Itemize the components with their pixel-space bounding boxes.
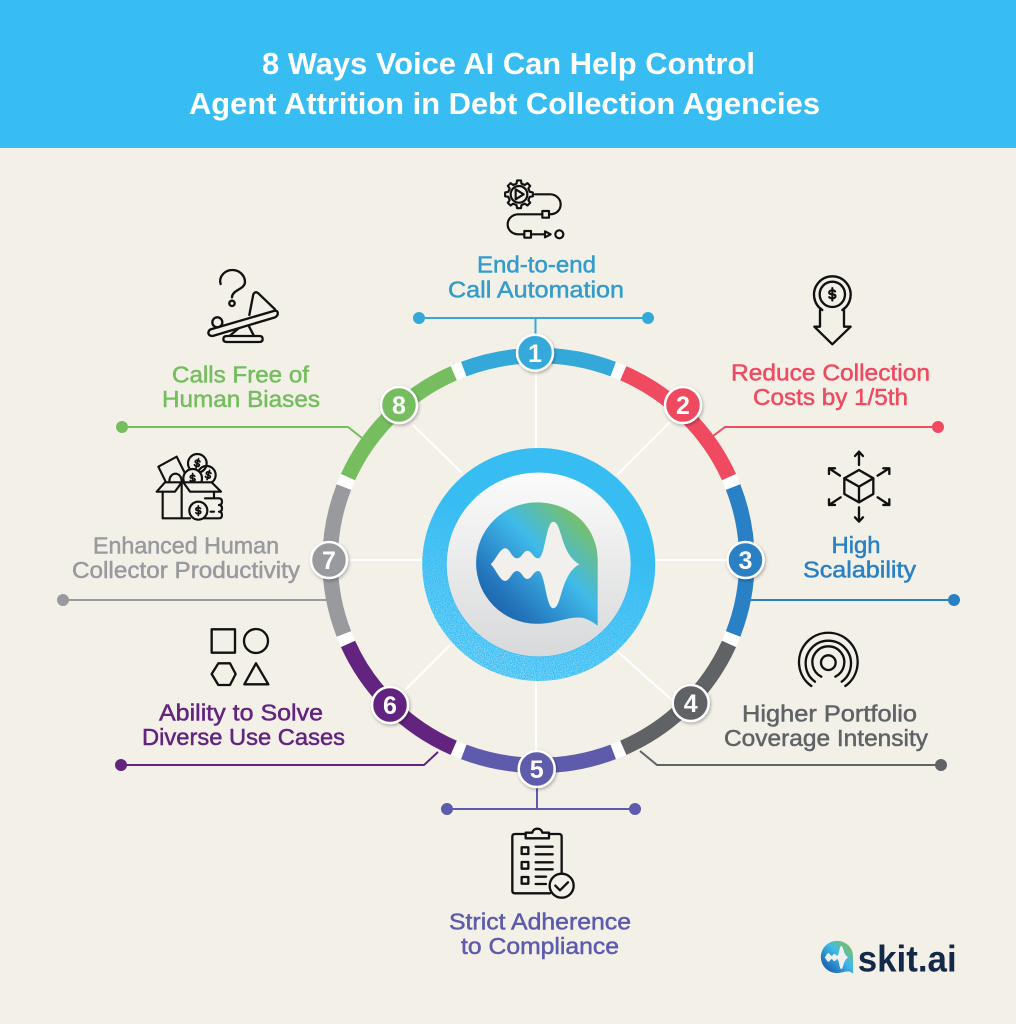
label 3: High <box>832 532 880 558</box>
badge 5 <box>519 751 555 787</box>
label 3: Scalability <box>803 557 916 583</box>
inner disc <box>447 472 631 656</box>
label 2: Reduce Collection <box>731 360 930 386</box>
label 1: End-to-end <box>477 252 596 278</box>
icon: geometric shapes <box>212 629 268 685</box>
badge 8 <box>381 387 417 423</box>
label 5: Strict Adherence <box>449 908 631 934</box>
label 6 <box>142 700 345 750</box>
label 1 <box>448 252 624 302</box>
number badges <box>311 335 764 787</box>
segment 6 <box>348 644 454 748</box>
icon: money box <box>157 454 222 520</box>
badge 8: 8 <box>392 392 406 420</box>
badge 7: 7 <box>322 547 336 575</box>
connector 4 <box>640 751 946 770</box>
label 4: Coverage Intensity <box>724 725 928 751</box>
speckle texture <box>434 460 643 669</box>
connector 8 <box>117 422 362 438</box>
label 4: Higher Portfolio <box>742 700 917 726</box>
logo waveform <box>491 522 579 608</box>
icon: coin down arrow <box>814 276 851 344</box>
connector 2 <box>713 422 943 436</box>
connector 7 <box>58 595 328 605</box>
label 7 <box>72 532 300 583</box>
segment 1 <box>464 355 613 369</box>
badge 1: 1 <box>528 340 542 368</box>
connector lines <box>58 313 959 814</box>
connector 3 <box>750 595 959 605</box>
label 2: Costs by 1/5th <box>753 384 908 410</box>
badge 5: 5 <box>530 756 544 784</box>
label 3 <box>803 532 916 583</box>
icon: seesaw with question mark <box>208 270 278 342</box>
label 1: Call Automation <box>448 276 624 302</box>
skit.ai logo <box>821 939 957 980</box>
segment 7 <box>330 487 344 634</box>
centre emblem <box>422 448 655 681</box>
segment 8 <box>348 373 454 477</box>
badge 1 <box>517 335 553 371</box>
badge 3 <box>728 542 764 578</box>
badge 3: 3 <box>739 547 752 575</box>
title: Agent Attrition in Debt Collection Agencies <box>189 86 820 121</box>
label 7: Enhanced Human <box>93 532 279 558</box>
segment 5 <box>464 752 613 766</box>
logo mark <box>821 941 853 974</box>
label 8: Calls Free of <box>172 362 309 388</box>
label 4 <box>724 700 928 751</box>
badge 7 <box>311 542 347 578</box>
blue ring <box>422 448 655 681</box>
badge 6: 6 <box>383 692 397 720</box>
badge 4: 4 <box>684 690 698 718</box>
badge 4 <box>673 685 709 721</box>
icon: gear automation flow <box>505 180 563 238</box>
logo wordmark: skit.ai <box>858 939 957 980</box>
segmented ring <box>330 355 747 766</box>
spokes <box>350 370 727 752</box>
badge 2 <box>665 387 701 423</box>
title: 8 Ways Voice AI Can Help Control <box>262 46 755 81</box>
logo bubble <box>476 502 598 626</box>
segment 2 <box>623 373 729 477</box>
icon: concentric arcs <box>799 633 858 686</box>
title <box>189 46 820 121</box>
label 8: Human Biases <box>162 386 320 412</box>
badge 6 <box>372 687 408 723</box>
label 2 <box>731 360 930 410</box>
connector 5 <box>442 788 640 814</box>
connector 1 <box>414 313 653 336</box>
badge 2: 2 <box>676 392 690 420</box>
label 5 <box>449 908 631 959</box>
label 8 <box>162 362 320 412</box>
label 5: to Compliance <box>461 933 619 959</box>
icon: expanding cube <box>829 452 889 522</box>
header band <box>0 0 1016 148</box>
label 7: Collector Productivity <box>72 557 300 583</box>
label 6: Diverse Use Cases <box>142 724 345 750</box>
connector 6 <box>116 752 438 770</box>
icon: compliance clipboard <box>512 829 574 898</box>
segment 3 <box>733 487 747 634</box>
segment 4 <box>623 644 729 748</box>
ring gaps <box>344 369 733 752</box>
label 6: Ability to Solve <box>159 700 323 726</box>
